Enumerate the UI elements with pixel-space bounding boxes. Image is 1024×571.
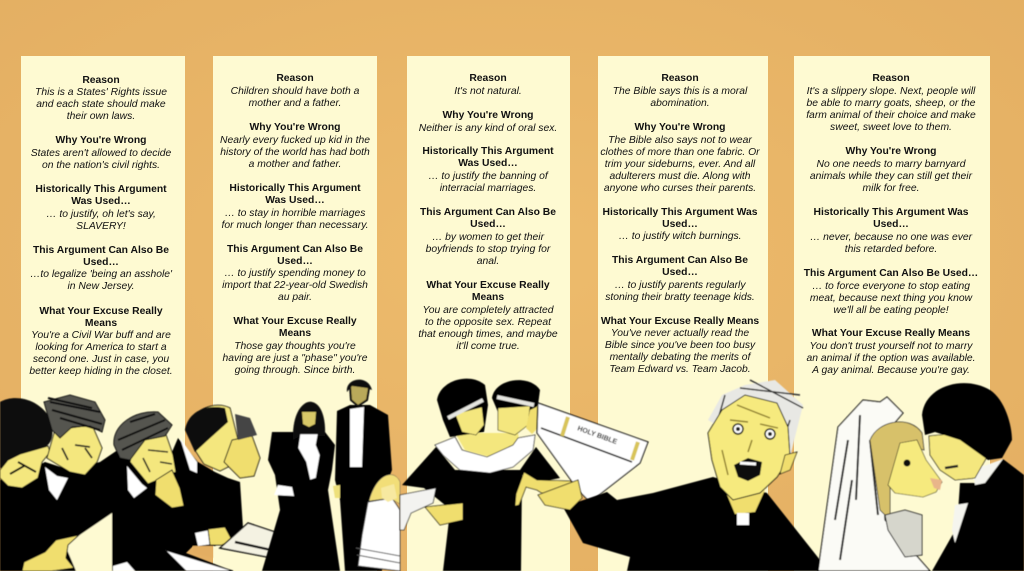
text: excuse means 2: Those gay thoughts you're <box>234 341 356 352</box>
column gap patch <box>193 546 213 558</box>
text: also used 4: This Argument Can Also Be <box>612 255 748 266</box>
text: also used 2: Used… <box>277 256 313 267</box>
father shirt <box>350 407 364 467</box>
left arm <box>425 503 463 525</box>
text: reason 5 <box>806 73 976 133</box>
text: excuse means 4: mentally debating the merits of <box>610 352 752 363</box>
text: excuse means 4: You've never actually read the <box>611 328 749 339</box>
text: reason 5: be able to marry goats, sheep, or the <box>806 98 976 109</box>
illustration: holy bible <box>537 403 648 502</box>
text: excuse means 3: that enough times, and maybe <box>418 329 558 340</box>
text: historically 4: Historically This Argument Was <box>602 207 758 218</box>
illustration: priest <box>538 380 820 571</box>
text: reason 2: Reason <box>276 73 314 84</box>
text: why wrong 2 <box>220 122 370 170</box>
text: why wrong 2: a mother and father. <box>249 159 341 170</box>
text: excuse means 3: it'll come true. <box>456 341 520 352</box>
text: excuse means 5: an animal if the option was available. <box>806 353 976 364</box>
text: reason 4 <box>613 73 748 109</box>
text: historically 1 <box>35 184 167 232</box>
text: reason 2 <box>231 73 360 109</box>
text: why wrong 4: Why You're Wrong <box>635 122 725 133</box>
text: also used 3: anal. <box>477 256 499 267</box>
text: also used 1: …to legalize 'being an asshole' <box>30 269 173 280</box>
text: reason 3: Reason <box>469 73 507 84</box>
chest <box>455 433 520 457</box>
text: reason 2: mother and a father. <box>249 98 341 109</box>
text: excuse means 3: You are completely attracted <box>422 305 555 316</box>
lace collar <box>435 435 535 473</box>
text: reason 1 <box>35 75 167 122</box>
priest face <box>708 395 790 500</box>
text: why wrong 4: trim your sideburns, ever. And all <box>605 159 756 170</box>
panel: not natural column <box>407 56 570 571</box>
text: excuse means 4: Bible since you've been too busy <box>605 340 756 351</box>
woman face <box>302 412 316 427</box>
illustration: two-headed woman <box>400 379 581 571</box>
text: excuse means 1: second one. Just in case, you <box>33 354 169 365</box>
pointing hand <box>22 535 79 571</box>
text: excuse means 1 <box>29 306 173 377</box>
dress <box>402 447 560 571</box>
text: also used 4 <box>605 255 755 303</box>
man 4 hair <box>185 407 228 452</box>
bride veil and gown <box>818 397 930 571</box>
text: historically 1: … to justify, oh let's say, <box>46 209 156 220</box>
text: historically 2: Was Used… <box>265 195 325 206</box>
text: excuse means 2 <box>222 316 368 376</box>
man 2 face <box>47 425 102 475</box>
child face <box>381 484 397 502</box>
text: excuse means 2: What Your Excuse Really <box>233 316 357 327</box>
illustration: bride dog and groom <box>818 383 1024 571</box>
text: reason 5: farm animal of their choice and make <box>806 110 976 121</box>
text: historically 2 <box>222 183 368 231</box>
text: excuse means 3: Means <box>472 292 504 303</box>
text: why wrong 3 <box>419 110 557 134</box>
text: excuse means 5 <box>806 328 976 376</box>
text: reason 5: sweet, sweet love to them. <box>830 122 952 133</box>
priest mouth <box>734 458 762 481</box>
text: excuse means 1: looking for America to start a <box>35 342 167 353</box>
text: historically 3: interracial marriages. <box>440 183 536 194</box>
text: reason 4: abomination. <box>650 98 710 109</box>
text: excuse means 5: You don't trust yourself not to marry <box>810 341 973 352</box>
text: also used 2 <box>222 244 368 303</box>
text: also used 2: … to justify spending money to <box>224 268 366 279</box>
text: also used 3 <box>420 207 556 267</box>
text: why wrong 2: history of the world has had both <box>220 147 370 158</box>
father head <box>350 382 369 406</box>
text: why wrong 5: No one needs to marry barnyard <box>817 159 967 170</box>
groom shirt <box>952 459 1003 543</box>
dog face <box>888 440 942 497</box>
text: also used 5 <box>804 268 978 316</box>
text: why wrong 1 <box>31 135 172 171</box>
text: excuse means 4: Team Edward vs. Team Jacob. <box>609 364 751 375</box>
text: also used 1: This Argument Can Also Be <box>33 245 169 256</box>
open folder <box>220 523 308 568</box>
text: historically 4: Used… <box>662 219 698 230</box>
father hand <box>333 485 340 498</box>
text: excuse means 3: to the opposite sex. Repeat <box>425 317 552 328</box>
text: historically 3 <box>422 146 554 194</box>
text: historically 3: … to justify the banning of <box>428 171 549 182</box>
text: why wrong 5: Why You're Wrong <box>846 146 936 157</box>
groom face <box>929 432 988 480</box>
priest eyes <box>733 424 775 439</box>
text: also used 3: boyfriends to stop trying for <box>426 244 551 255</box>
text: why wrong 1: Why You're Wrong <box>56 135 146 146</box>
groom suit <box>932 459 1024 571</box>
text: reason 1: This is a States' Rights issue <box>35 87 167 98</box>
text: historically 2: Historically This Argument <box>229 183 361 194</box>
text: why wrong 4: The Bible also says not to wear <box>608 135 752 146</box>
text: historically 4 <box>602 207 758 242</box>
text: why wrong 4 <box>600 122 760 194</box>
text: also used 2: au pair. <box>278 292 312 303</box>
priest hand <box>538 480 582 510</box>
text: reason 4: Reason <box>661 73 699 84</box>
man 5 face <box>224 436 260 478</box>
man 2 hair <box>44 395 105 438</box>
child hair <box>369 475 400 504</box>
text: why wrong 5: animals while they can still get their <box>810 171 973 182</box>
right face <box>498 406 530 435</box>
text: why wrong 5 <box>810 146 973 194</box>
text: excuse means 1: better keep hiding in the closet. <box>29 366 173 377</box>
priest ear <box>780 452 797 474</box>
man 3 collar <box>127 466 147 498</box>
right arm <box>515 472 581 506</box>
man 5 hair <box>235 414 257 440</box>
text: reason 5: Reason <box>872 73 910 84</box>
hat bands <box>448 397 534 418</box>
bride hair <box>870 422 924 520</box>
text: also used 1: in New Jersey. <box>67 281 135 292</box>
text: why wrong 3: Why You're Wrong <box>443 110 533 121</box>
right hat <box>492 380 540 412</box>
text: why wrong 1: on the nation's civil rights. <box>42 160 160 171</box>
text: also used 4: … to justify parents regularly <box>614 280 746 291</box>
text: excuse means 1: Means <box>85 318 117 329</box>
woman dress <box>262 432 340 571</box>
priest collar <box>737 513 749 525</box>
left hat <box>437 379 488 437</box>
man 4 head <box>186 405 238 471</box>
text: also used 3: … by women to get their <box>432 232 545 243</box>
text: also used 4: Used… <box>662 267 698 278</box>
suits <box>0 438 243 571</box>
text: excuse means 1: You're a Civil War buff and are <box>31 330 171 341</box>
text: also used 1 <box>30 245 173 292</box>
panel: states' rights column <box>21 56 185 571</box>
woman hair <box>293 402 325 440</box>
text: historically 3: Was Used… <box>458 158 518 169</box>
man's shirt cuff <box>195 530 212 546</box>
text: excuse means 2: Means <box>279 328 311 339</box>
text: excuse means 1: What Your Excuse Really <box>39 306 163 317</box>
text: also used 2: import that 22-year-old Swedish <box>222 280 368 291</box>
child dress <box>358 498 400 571</box>
illustration: mother, father and child <box>262 380 400 571</box>
priest suit <box>563 477 820 571</box>
text: excuse means 4: What Your Excuse Really Means <box>601 316 759 327</box>
text: why wrong 3: Neither is any kind of oral sex. <box>419 123 557 134</box>
text: historically 5: this retarded before. <box>845 244 937 255</box>
text: excuse means 5: What Your Excuse Really Means <box>812 328 970 339</box>
text: historically 4: … to justify witch burnings. <box>618 231 742 242</box>
left face <box>455 407 484 435</box>
text: reason 1: Reason <box>82 75 120 86</box>
text: reason 1: and each state should make <box>36 99 166 110</box>
man's hand <box>208 527 232 545</box>
text: excuse means 2: going through. Since birth. <box>235 365 355 376</box>
panel: children column <box>213 56 377 571</box>
text: historically 5 <box>810 207 973 255</box>
paper <box>113 562 135 571</box>
text: historically 2: … to stay in horrible marriages <box>225 208 365 219</box>
text: why wrong 4: adulterers must die. Along with <box>609 171 751 182</box>
text: also used 3: Used… <box>470 219 506 230</box>
text: why wrong 4: anyone who curses their parents. <box>604 183 756 194</box>
bible title: HOLY BIBLE <box>576 425 618 446</box>
man 2 collar <box>45 467 68 500</box>
text: historically 3: Historically This Argument <box>422 146 554 157</box>
text: historically 5: Historically This Argument Was <box>814 207 969 218</box>
text: excuse means 3 <box>418 280 558 352</box>
text: reason 5: It's a slippery slope. Next, people will <box>807 86 976 97</box>
text: historically 1: Historically This Argument <box>35 184 167 195</box>
lace collar <box>885 510 922 557</box>
man 3 hand <box>155 470 184 508</box>
text: why wrong 5: milk for free. <box>863 183 919 194</box>
left cuff <box>400 488 436 530</box>
woman cuff <box>274 485 294 496</box>
dog nose <box>930 478 942 490</box>
text: excuse means 2: having are just a "phase" you're <box>222 353 368 364</box>
text: historically 5: … never, because no one was ever <box>810 232 973 243</box>
text: why wrong 4: clothes of more than one fabric. Or <box>600 147 760 158</box>
text: why wrong 2: Nearly every fucked up kid in the <box>220 135 370 146</box>
text: also used 2: This Argument Can Also Be <box>227 244 363 255</box>
man 3 face <box>130 432 176 484</box>
text: historically 5: Used… <box>873 219 909 230</box>
text: also used 5: meat, because next thing you know <box>810 293 974 304</box>
text: excuse means 4 <box>601 316 759 375</box>
woman collar <box>298 434 320 480</box>
man 1 face <box>0 446 50 488</box>
man 1 hair <box>0 398 52 468</box>
ear <box>526 404 543 434</box>
text: also used 5: we'll all be eating people! <box>833 305 949 316</box>
father suit <box>335 405 392 571</box>
father hair <box>347 380 372 392</box>
second folder <box>165 550 233 571</box>
man 4 collar <box>180 438 197 473</box>
text: historically 1: Was Used… <box>71 196 131 207</box>
text: why wrong 2: Why You're Wrong <box>250 122 340 133</box>
text: historically 1: SLAVERY! <box>76 221 126 232</box>
text: excuse means 3: What Your Excuse Really <box>426 280 550 291</box>
text: reason 3: It's not natural. <box>454 86 522 97</box>
priest neck <box>725 490 765 514</box>
text: why wrong 1: States aren't allowed to decide <box>31 148 172 159</box>
text: excuse means 5: A gay animal. Because you're gay. <box>811 365 970 376</box>
groom hair <box>922 383 1012 460</box>
priest hair <box>708 380 803 470</box>
text: also used 5: … to force everyone to stop eating <box>812 281 970 292</box>
text: also used 3: This Argument Can Also Be <box>420 207 556 218</box>
text: reason 4: The Bible says this is a moral <box>613 86 748 97</box>
text: reason 3 <box>454 73 522 97</box>
lower background cream <box>65 513 112 571</box>
text: historically 2: for much longer than necessary. <box>222 220 368 231</box>
illustration: group of men in suits <box>0 395 308 571</box>
text: reason 2: Children should have both a <box>231 86 360 97</box>
text: reason 1: their own laws. <box>67 111 135 122</box>
man 3 hair <box>114 412 172 460</box>
panel: bible column <box>598 56 768 571</box>
text: also used 1: Used… <box>83 257 119 268</box>
text: also used 4: stoning their bratty teenage kids. <box>605 292 755 303</box>
panel: slippery slope column <box>794 56 990 571</box>
text: also used 5: This Argument Can Also Be Used… <box>804 268 978 279</box>
